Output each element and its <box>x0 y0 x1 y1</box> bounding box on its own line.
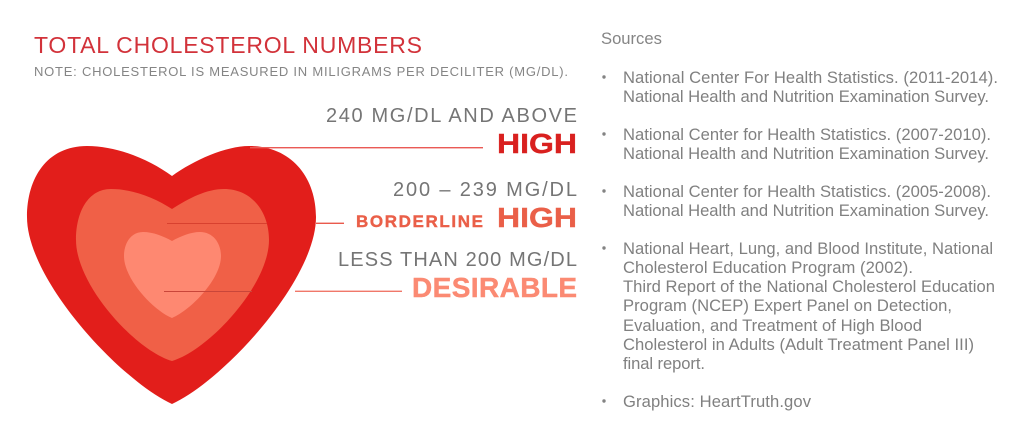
middle heart: borderline high <box>76 189 269 361</box>
source 4: Cholesterol in Adults (Adult Treatment Panel III) <box>623 335 974 354</box>
source 1 <box>602 68 998 106</box>
source 5: Graphics: HeartTruth.gov <box>623 392 812 411</box>
source 3: National Health and Nutrition Examination Survey. <box>623 201 989 220</box>
range label: 200-239: 200 – 239 MG/DL <box>393 179 577 201</box>
source 3: National Center for Health Statistics. (2005-2008). <box>623 182 991 201</box>
source 1: National Health and Nutrition Examination Survey. <box>623 87 989 106</box>
source 4: National Heart, Lung, and Blood Institute, National <box>623 239 993 258</box>
category: borderline high: HIGH <box>497 202 577 233</box>
inner heart: desirable <box>124 232 221 318</box>
note on units: NOTE: CHOLESTEROL IS MEASURED IN MILIGRAMS PER DECILITER (MG/DL). <box>34 64 568 79</box>
range label: 240 and above: 240 MG/DL AND ABOVE <box>326 105 577 127</box>
sources heading: Sources <box>601 29 662 48</box>
source 4: Third Report of the National Cholesterol Education <box>623 277 995 296</box>
leader line: desirable <box>164 291 402 292</box>
category: desirable: DESIRABLE <box>412 272 577 303</box>
source 2: National Center for Health Statistics. (2007-2010). <box>623 125 991 144</box>
category: borderline high <box>356 202 577 233</box>
title: TOTAL CHOLESTEROL NUMBERS <box>34 32 422 58</box>
category: borderline high: BORDERLINE <box>356 212 483 231</box>
source 1: National Center For Health Statistics. (2011-2014). <box>623 68 998 87</box>
leader line: borderline high <box>167 223 344 224</box>
category: high: HIGH <box>497 128 577 159</box>
source 4: Cholesterol Education Program (2002). <box>623 258 913 277</box>
source 4: final report. <box>623 354 705 373</box>
leader line: high <box>250 147 483 148</box>
source 4 <box>602 239 995 373</box>
source 4: Evaluation, and Treatment of High Blood <box>623 316 922 335</box>
source 2 <box>602 125 991 163</box>
sources list <box>602 68 998 411</box>
source 2: National Health and Nutrition Examination Survey. <box>623 144 989 163</box>
range label: less than 200: LESS THAN 200 MG/DL <box>338 249 577 271</box>
source 3 <box>602 182 991 220</box>
source 4: Program (NCEP) Expert Panel on Detection, <box>623 296 952 315</box>
outer heart: high <box>27 146 316 404</box>
heart diagram <box>27 146 316 404</box>
